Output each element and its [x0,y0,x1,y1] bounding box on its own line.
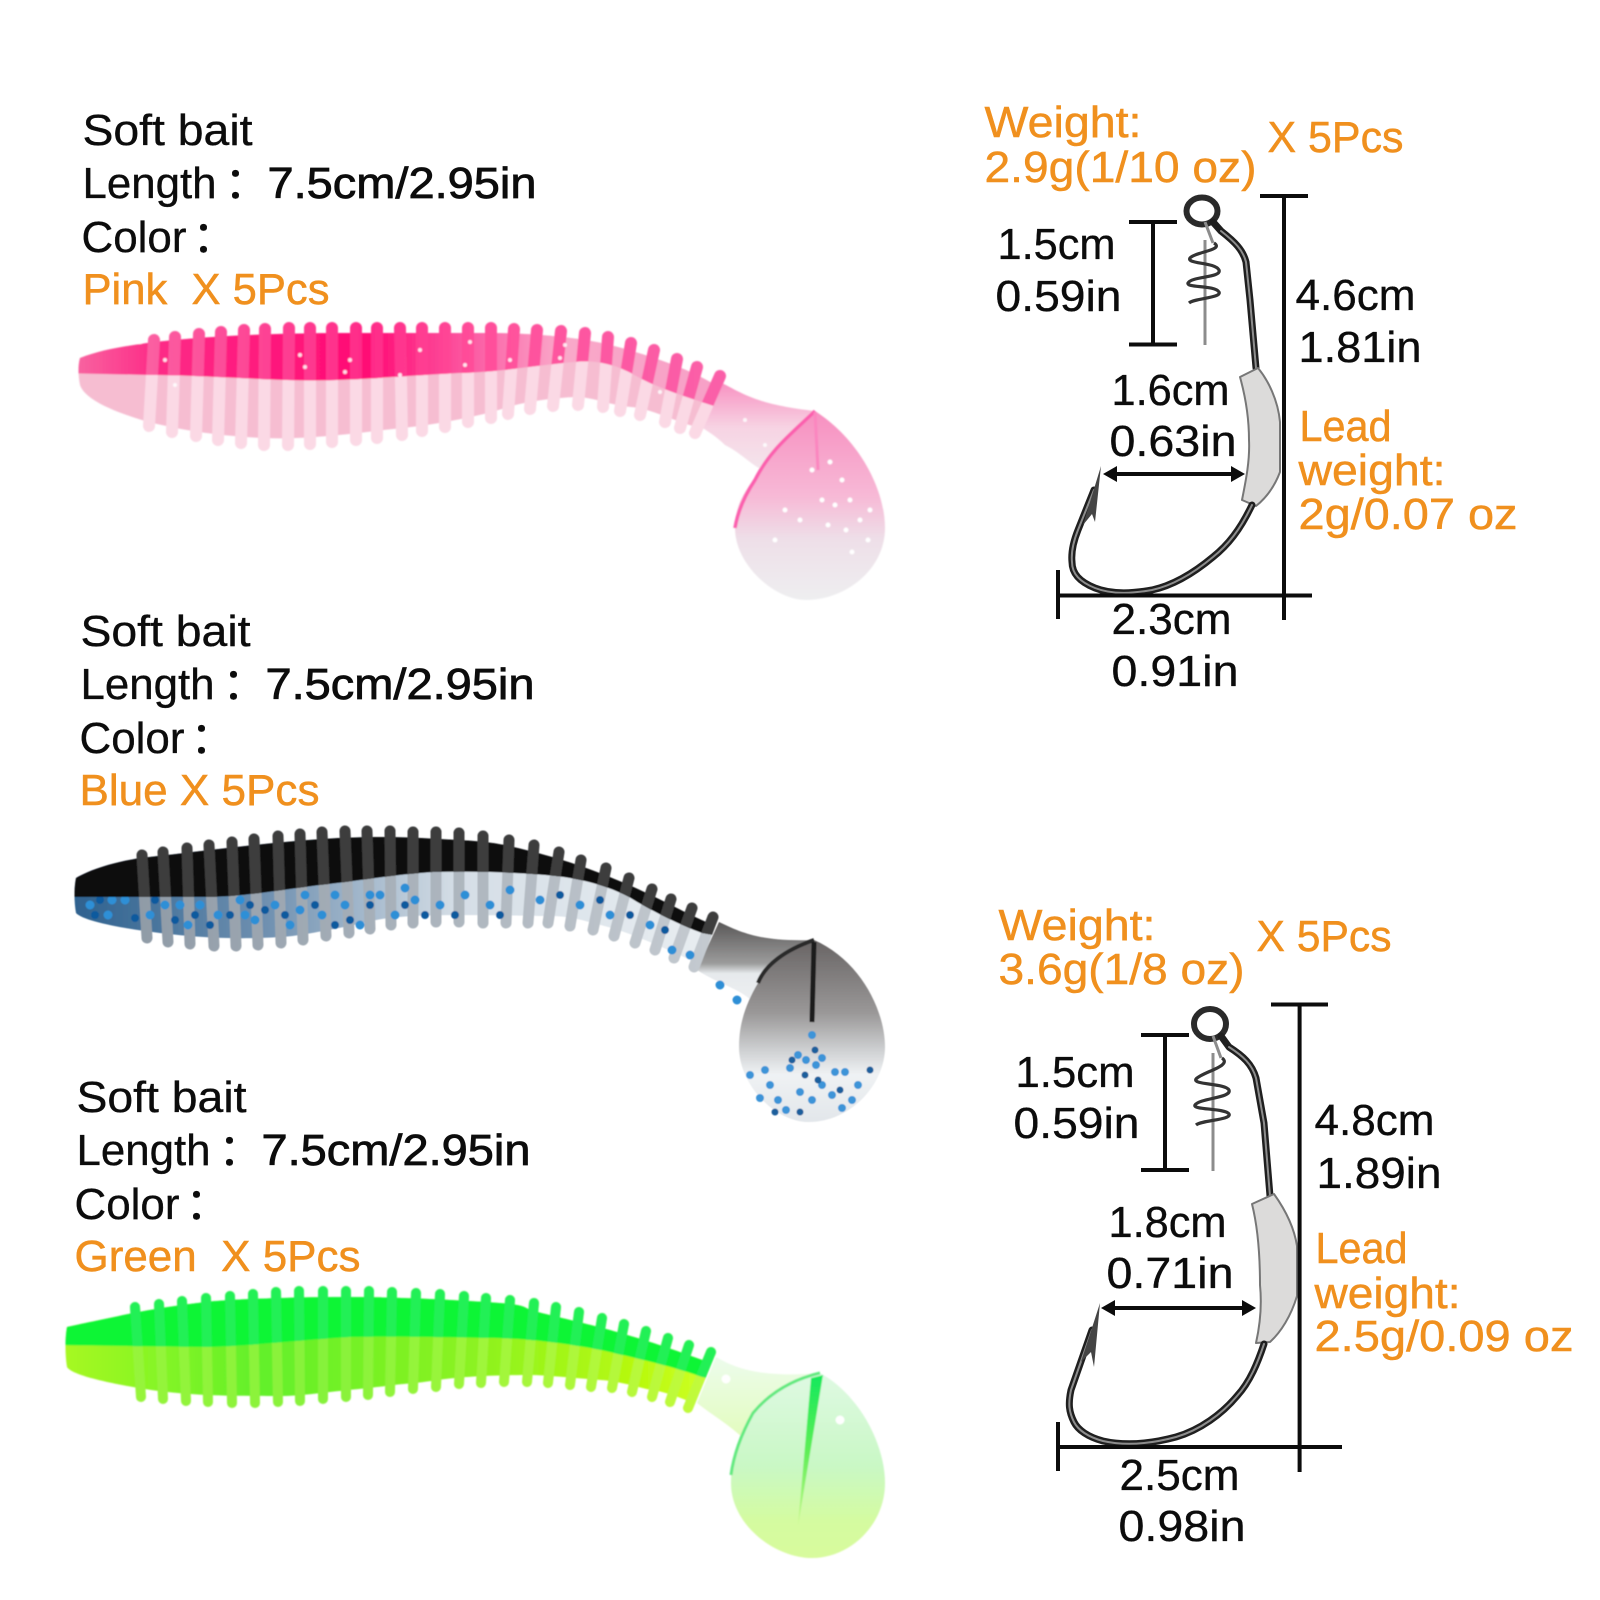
panel: pink soft bait specification [78,106,885,600]
black back [74,824,720,936]
text block: green bait specs: Length [76,1126,210,1175]
yellow-green belly [66,1297,708,1402]
panel: large weighted hook [998,901,1574,1551]
text block: blue bait specs: Color [80,714,184,763]
glitter [140,342,765,445]
text block: green bait specs: 7.5cm/2.95in [262,1126,530,1175]
text: lead weight: Lead [1316,1224,1408,1273]
text: lead weight: 2.5g/0.09 oz [1314,1312,1574,1361]
tail connector [697,1357,820,1440]
dimension: spring 1.5cm: 1.5cm [998,220,1116,269]
text block: blue bait specs: Soft bait [80,607,250,656]
tail connector [697,383,815,472]
dimension: spring 1.5cm: 0.59in [996,272,1122,321]
pale belly [78,333,720,438]
heading: weight and quantity: Weight: [984,98,1142,147]
arrow: gap 1.8cm [1101,1198,1256,1316]
dimension: width 2.3cm: 0.91in [1112,647,1238,696]
text block: blue bait specs: ： [222,660,266,709]
text block: green bait specs [74,1073,530,1281]
text block: pink bait specs: ： [192,213,236,262]
panel: blue soft bait specification [74,607,885,1122]
dimension: total height 4.6cm: 1.81in [1298,323,1422,372]
text block: green bait specs: Color [74,1180,180,1229]
dimension: width 2.5cm [1058,1422,1342,1551]
pink bait illustration [78,328,885,600]
text block: pink bait specs [82,106,536,314]
green back [64,1285,717,1378]
panel: small weighted hook [984,98,1518,696]
heading: weight and quantity: 3.6g(1/8 oz) [998,945,1244,994]
text block: green bait specs: ： [218,1126,262,1175]
heading: weight and quantity [984,98,1404,192]
dimension: spring 1.5cm: 0.59in [1014,1099,1140,1148]
text block: pink bait specs: ： [224,159,268,208]
green bait illustration [66,1291,885,1558]
tail paddle [726,1373,885,1558]
dimension: spring 1.5cm: 1.5cm [1016,1048,1134,1097]
dimension: total height 4.8cm [1271,1004,1442,1472]
dimension: spring 1.5cm [1014,1035,1189,1170]
dimension: width 2.5cm: 0.98in [1118,1502,1246,1551]
dimension: total height 4.8cm: 4.8cm [1314,1096,1434,1145]
heading: weight and quantity [998,901,1392,994]
text block: blue bait specs: ： [190,714,234,763]
text block: pink bait specs: 7.5cm/2.95in [268,159,536,208]
heading: weight and quantity: X 5Pcs [1256,912,1392,961]
belly ribs [149,328,720,445]
text: lead weight: weight: [1297,446,1446,495]
arrow: gap 1.6cm [1103,366,1245,482]
text block: blue bait specs [80,607,534,815]
text block: blue bait specs: 7.5cm/2.95in [266,660,534,709]
heading: weight and quantity: 2.9g(1/10 oz) [984,143,1256,192]
text: lead weight: Lead [1300,402,1392,451]
arrow: gap 1.6cm: 0.63in [1110,417,1236,466]
text block: pink bait specs: Soft bait [82,106,252,155]
dimension: width 2.3cm [1058,570,1312,696]
arrow: gap 1.6cm: 1.6cm [1112,366,1230,415]
belly ribs [135,1291,711,1408]
text: lead weight [1297,402,1518,539]
arrow: gap 1.8cm: 1.8cm [1108,1198,1226,1247]
blue bait illustration [74,831,885,1122]
text block: blue bait specs: Length [80,660,214,709]
icon: weighted hook with spring [1069,1009,1297,1444]
pink back [78,321,727,406]
dimension: spring 1.5cm [996,220,1177,344]
tail paddle [735,411,885,600]
text block: green bait specs: ： [186,1180,230,1229]
arrow: gap 1.8cm: 0.71in [1106,1249,1234,1298]
translucent belly [74,837,714,962]
dimension: total height 4.6cm: 4.6cm [1296,271,1416,320]
text block: green bait specs: Soft bait [76,1073,246,1122]
dimension: width 2.5cm: 2.5cm [1120,1451,1240,1500]
heading: weight and quantity: Weight: [998,901,1156,950]
panel: green soft bait specification [66,1073,885,1558]
text block: pink bait specs: Pink X 5Pcs [82,265,330,314]
text: lead weight: 2g/0.07 oz [1298,490,1518,539]
dimension: total height 4.6cm [1260,196,1422,620]
text: lead weight: weight: [1313,1269,1460,1318]
belly ribs [142,831,713,967]
dimension: total height 4.8cm: 1.89in [1316,1149,1442,1198]
text block: blue bait specs: Blue X 5Pcs [80,766,320,815]
text: lead weight [1313,1224,1574,1361]
heading: weight and quantity: X 5Pcs [1268,113,1404,162]
blue flakes [90,888,737,1000]
icon: weighted hook with spring [1072,198,1280,593]
tail paddle [739,940,885,1122]
text block: pink bait specs: Color [82,213,186,262]
dimension: width 2.3cm: 2.3cm [1112,595,1232,644]
text block: green bait specs: Green X 5Pcs [74,1232,360,1281]
text block: pink bait specs: Length [82,159,216,208]
tail connector [697,922,814,1005]
